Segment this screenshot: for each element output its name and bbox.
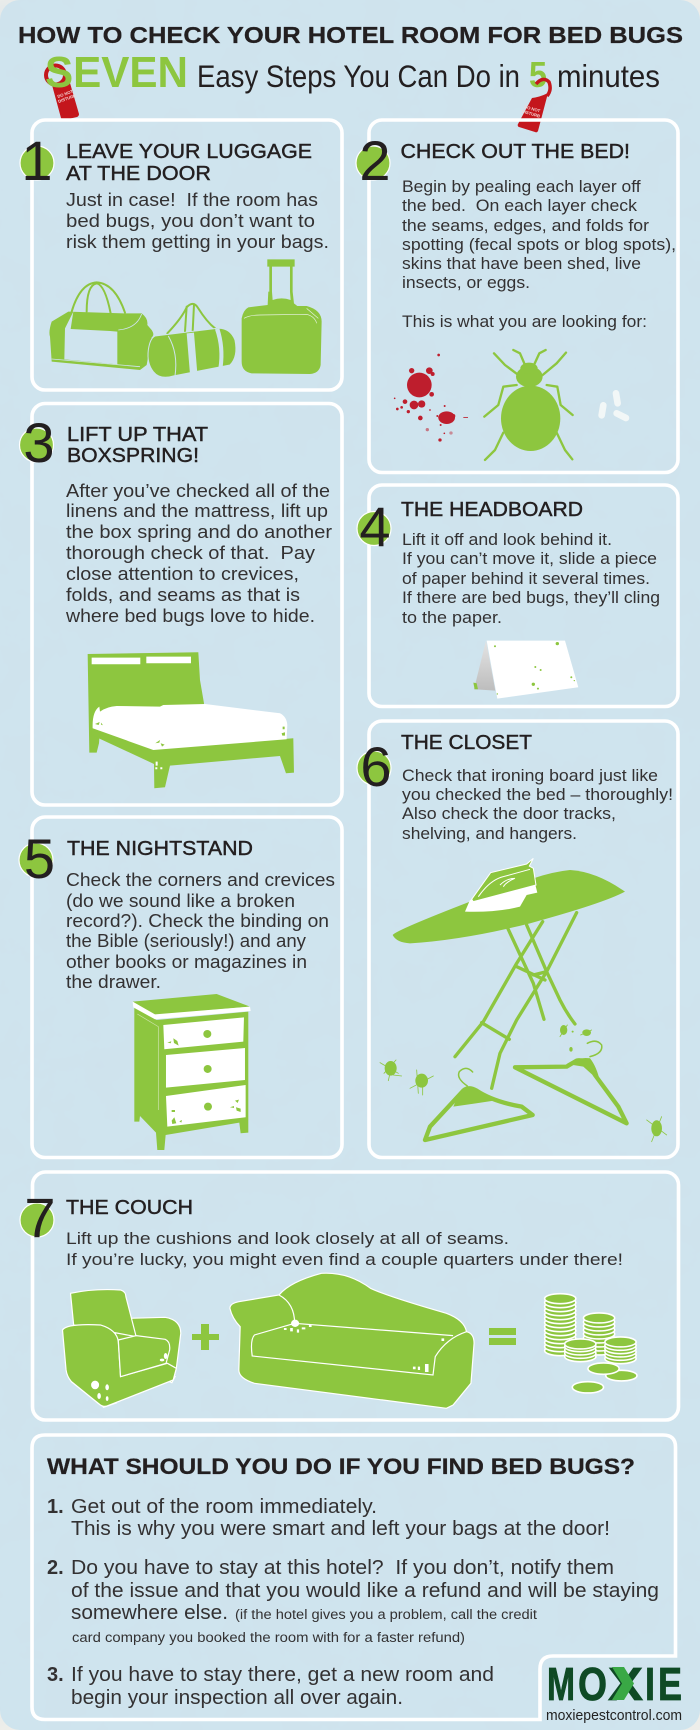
body text: skins that have been shed, live bbox=[402, 254, 641, 273]
heading: BOXSPRING! bbox=[67, 444, 199, 467]
list item 2: somewhere else. bbox=[71, 1602, 228, 1624]
heading: CHECK OUT THE BED! bbox=[400, 140, 630, 163]
icon: stacks of quarters bbox=[545, 1294, 637, 1393]
list item 2: of the issue and that you would like a refund and will be staying bbox=[71, 1580, 659, 1602]
list item 2: 2. bbox=[47, 1557, 64, 1579]
number badge 3: 3 bbox=[23, 411, 55, 474]
body text bbox=[65, 480, 332, 626]
body text bbox=[402, 530, 660, 627]
body text: Just in case! If the room has bbox=[66, 189, 318, 210]
heading: THE NIGHTSTAND bbox=[67, 837, 253, 860]
number badge 6: 6 bbox=[360, 735, 392, 798]
icon: bed bbox=[88, 652, 294, 788]
list item 1 bbox=[47, 1496, 610, 1540]
subtitle bbox=[45, 48, 660, 97]
icon: couch bbox=[230, 1273, 474, 1408]
body text: If you can’t move it, slide a piece bbox=[402, 549, 657, 568]
body text: of paper behind it several times. bbox=[402, 569, 650, 588]
body text: the bed. On each layer check bbox=[402, 196, 638, 215]
panel frame bbox=[32, 1172, 678, 1420]
icon: armchair bbox=[62, 1290, 181, 1407]
number badge 1: 1 bbox=[21, 129, 53, 192]
body text bbox=[402, 766, 673, 843]
panel: step 7 couch bbox=[20, 1172, 678, 1420]
list item 3: 3. bbox=[47, 1664, 64, 1686]
body text: Check the corners and crevices bbox=[66, 869, 335, 890]
body text: shelving, and hangers. bbox=[402, 824, 577, 843]
subtitle: minutes bbox=[557, 58, 660, 94]
illustration: ironing board and hangers bbox=[380, 858, 667, 1142]
icon: plus sign bbox=[192, 1324, 219, 1350]
illustration: blood spots bbox=[394, 354, 468, 442]
heading: LIFT UP THAT bbox=[67, 423, 208, 446]
heading: THE COUCH bbox=[66, 1196, 193, 1219]
subtitle: Easy Steps You Can Do in bbox=[197, 58, 520, 94]
logo: moxie: moxiepestcontrol.com bbox=[546, 1707, 682, 1724]
icon: equals sign bbox=[489, 1328, 516, 1345]
panel: step 5 nightstand bbox=[19, 817, 342, 1158]
body text: insects, or eggs. bbox=[402, 273, 530, 292]
heading bbox=[67, 423, 208, 467]
list item 1: 1. bbox=[47, 1496, 64, 1518]
door hanger: right: DISTURB bbox=[521, 109, 541, 119]
body text bbox=[66, 189, 329, 252]
panel frame bbox=[369, 721, 678, 1158]
list item 2: card company you booked the room with for a faster refund) bbox=[72, 1630, 465, 1645]
body text: folds, and seams as that is bbox=[66, 584, 300, 605]
illustration: bed bug bbox=[484, 350, 573, 460]
list item 3: begin your inspection all over again. bbox=[71, 1687, 403, 1709]
body text: where bed bugs love to hide. bbox=[65, 605, 315, 626]
heading: WHAT SHOULD YOU DO IF YOU FIND BED BUGS? bbox=[47, 1454, 635, 1479]
number badge 7: 7 bbox=[24, 1186, 56, 1249]
panel: step 1 luggage bbox=[20, 120, 342, 390]
heading bbox=[66, 140, 312, 185]
number badge 2: 2 bbox=[359, 129, 391, 192]
illustration: bug eggs bbox=[602, 393, 626, 418]
logo: moxie: E bbox=[658, 1658, 682, 1710]
door hanger: left: DISTURB bbox=[57, 93, 77, 104]
body text: the Bible (seriously!) and any bbox=[66, 930, 307, 951]
panel: step 6 closet bbox=[357, 721, 678, 1158]
door hanger: right: DO NOT bbox=[524, 104, 541, 114]
body text: Lift up the cushions and look closely at all of seams. bbox=[66, 1229, 509, 1248]
body text: to the paper. bbox=[402, 608, 502, 627]
body text bbox=[66, 869, 335, 992]
panel frame bbox=[369, 485, 678, 706]
panel frame bbox=[32, 404, 342, 805]
illustration: folded paper bbox=[473, 641, 578, 699]
number badge 4: 4 bbox=[359, 495, 391, 558]
panel: step 2 bed bbox=[356, 120, 678, 472]
panel frame bbox=[32, 1435, 676, 1720]
body text bbox=[402, 177, 676, 331]
body text: Check that ironing board just like bbox=[402, 766, 658, 785]
panel frame bbox=[32, 120, 342, 390]
icon: nightstand bbox=[133, 994, 251, 1150]
list item 2: (if the hotel gives you a problem, call the credit bbox=[235, 1607, 537, 1622]
logo: moxie: M bbox=[547, 1658, 575, 1710]
body text: the seams, edges, and folds for bbox=[402, 216, 649, 235]
body text: If there are bed bugs, they’ll cling bbox=[402, 588, 660, 607]
list item 3: If you have to stay there, get a new room and bbox=[71, 1664, 494, 1686]
body text: other books or magazines in bbox=[66, 951, 307, 972]
subtitle: 5 bbox=[529, 54, 547, 95]
body text bbox=[66, 1229, 623, 1269]
body text: bed bugs, you don’t want to bbox=[66, 210, 315, 231]
heading: AT THE DOOR bbox=[66, 162, 211, 185]
list item 2 bbox=[47, 1557, 659, 1645]
door hanger: left: DO NOT bbox=[57, 89, 74, 99]
body text: (do we sound like a broken bbox=[66, 890, 295, 911]
list item 2: Do you have to stay at this hotel? If you don’t, notify them bbox=[71, 1557, 614, 1579]
logo: moxie: X bbox=[608, 1658, 643, 1710]
heading: THE CLOSET bbox=[401, 731, 532, 754]
body text: record?). Check the binding on bbox=[66, 910, 329, 931]
list item 3 bbox=[47, 1664, 494, 1709]
logo: moxie: O bbox=[578, 1658, 607, 1710]
logo: moxie bbox=[546, 1658, 682, 1724]
body text: Lift it off and look behind it. bbox=[402, 530, 612, 549]
body text: Also check the door tracks, bbox=[402, 804, 616, 823]
body text: the drawer. bbox=[66, 971, 161, 992]
heading: THE HEADBOARD bbox=[401, 498, 583, 521]
body text: spotting (fecal spots or blog spots), bbox=[402, 235, 676, 254]
body text: risk them getting in your bags. bbox=[66, 231, 329, 252]
body text: the box spring and do another bbox=[66, 521, 332, 542]
panel: step 4 headboard bbox=[357, 485, 678, 706]
heading: LEAVE YOUR LUGGAGE bbox=[66, 140, 312, 163]
icon: luggage bbox=[49, 259, 322, 377]
subtitle: SEVEN bbox=[45, 48, 188, 97]
list item 1: This is why you were smart and left your bags at the door! bbox=[71, 1518, 610, 1540]
body text: thorough check of that. Pay bbox=[66, 542, 316, 563]
body text: This is what you are looking for: bbox=[402, 312, 647, 331]
panel: step 3 boxspring bbox=[20, 404, 342, 805]
body text: linens and the mattress, lift up bbox=[66, 500, 328, 521]
door hanger: right bbox=[518, 79, 550, 132]
panel: what to do if you find bed bugs bbox=[32, 1435, 682, 1724]
body text: If you’re lucky, you might even find a couple quarters under there! bbox=[66, 1250, 623, 1269]
body text: Begin by pealing each layer off bbox=[402, 177, 641, 196]
door hanger: left bbox=[46, 66, 79, 120]
body text: you checked the bed – thoroughly! bbox=[402, 785, 673, 804]
title: HOW TO CHECK YOUR HOTEL ROOM FOR BED BUGS bbox=[18, 22, 683, 48]
logo: moxie: I bbox=[645, 1658, 655, 1710]
panel frame bbox=[32, 817, 342, 1158]
body text: After you’ve checked all of the bbox=[66, 480, 330, 501]
list item 1: Get out of the room immediately. bbox=[71, 1496, 377, 1518]
number badge 5: 5 bbox=[24, 827, 55, 890]
panel frame bbox=[369, 120, 678, 472]
body text: close attention to crevices, bbox=[66, 563, 299, 584]
